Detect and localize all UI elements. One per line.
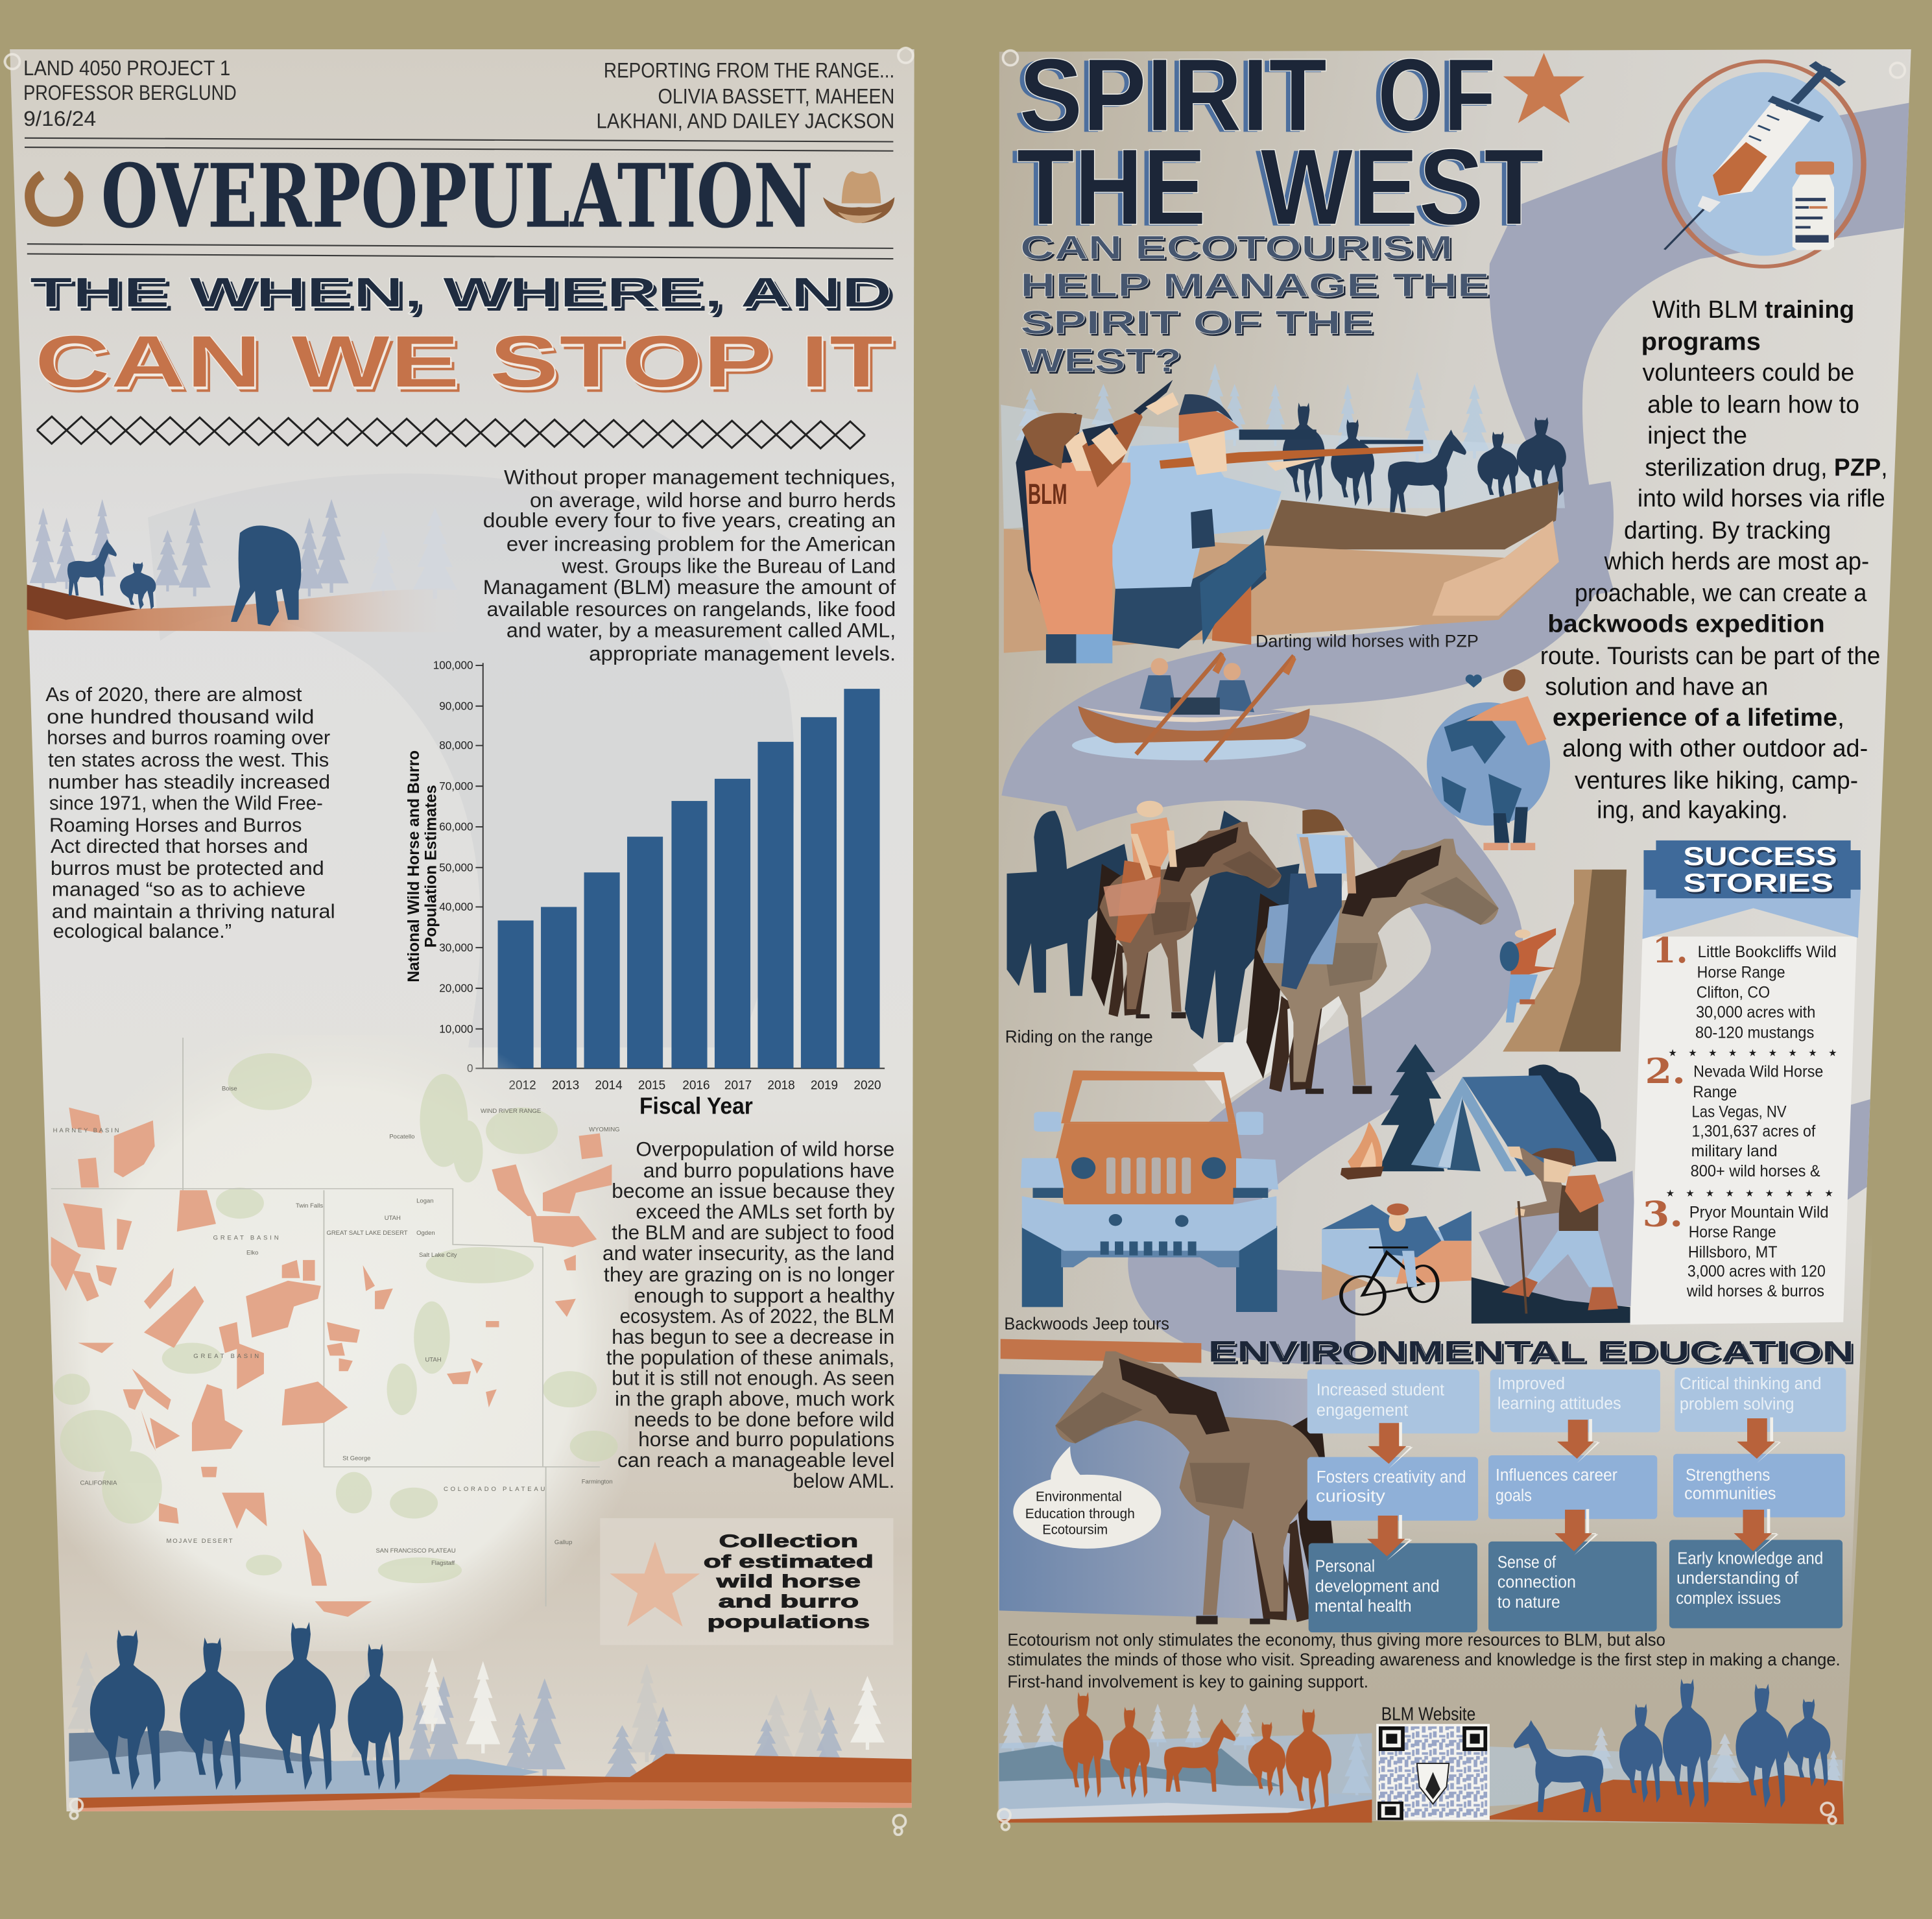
map: estimated herd areas: UTAH [425,1357,442,1364]
map: estimated herd areas: St George [342,1455,370,1462]
text block: training programs: backwoods expedition [1547,611,1825,638]
story 2 nevada: military land [1691,1143,1778,1160]
flow boxes row 1: Improved [1497,1375,1565,1393]
flow boxes row 2: curiosity [1316,1488,1385,1506]
text block: training programs: inject the [1647,422,1747,449]
story 2 nevada: Range [1693,1084,1737,1101]
header left course info: 9/16/24 [23,107,96,130]
text block: training programs: experience of a lifetime , [1553,704,1844,732]
story 1 little bookcliffs: Horse Range [1697,964,1785,982]
text block: intro [483,466,896,665]
text block: overpopulation of wild horse: enough to support a healthy [634,1284,895,1307]
text block: intro: appropriate management levels. [589,642,896,665]
heading: success stories [1683,842,1839,900]
flow boxes row 3 [1309,1540,1843,1632]
map: estimated herd areas: Boise [222,1086,237,1093]
title: spirit of the west: SPIRIT [1019,37,1327,152]
text block: intro: Managament (BLM) measure the amount of [483,576,896,599]
heading: can we stop it: CAN WE STOP IT [36,323,894,405]
caption: riding on the range: Riding on the range [1005,1027,1153,1046]
map legend: collection of populations: Collection [719,1531,858,1551]
bar chart: population estimates: Population Estimates [423,785,440,948]
map: estimated herd areas: Farmington [582,1479,613,1486]
text block: as of 2020: ten states across the west. This [48,749,329,771]
heading: can we stop it: CAN WE STOP IT [34,321,893,403]
text block: training programs: which herds are most ap- [1604,548,1869,575]
header right authors: REPORTING FROM THE RANGE... [604,59,894,82]
bar chart: population estimates: 0 [467,1062,473,1075]
flow boxes row 2: Strengthens [1686,1466,1770,1484]
story 1 little bookcliffs: 1. [1652,930,1688,971]
title: spirit of the west: THE [1016,127,1206,248]
flow boxes row 2: Influences career [1496,1466,1617,1484]
footer scene: horses and ridge [999,1679,1844,1824]
text block: overpopulation of wild horse: has begun to see a decrease in [612,1326,894,1348]
panel: left poster overpopulation [10,49,914,1818]
illustration: darting wild horses [1001,363,1566,663]
title: spirit of the west: SPIRIT [1014,38,1322,154]
map: estimated herd areas: WIND RIVER RANGE [481,1108,541,1115]
heading: environmental education: ENVIRONMENTAL EDUCATION [1208,1335,1854,1368]
subtitle: can ecotourism help: HELP MANAGE THE [1022,268,1492,305]
header right authors [597,59,894,133]
story 3 pryor mountain [1643,1194,1829,1300]
text block: intro: west. Groups like the Bureau of Land [561,555,896,578]
text block: training programs: along with other outdoor ad- [1562,735,1868,763]
text block: as of 2020: ecological balance.” [53,920,232,942]
flow boxes row 2: Fosters creativity and [1317,1468,1466,1486]
text block: as of 2020: since 1971, when the Wild Free- [49,792,323,814]
subtitle: can ecotourism help: WEST? [1022,344,1184,381]
bar chart: population estimates: 2016 [682,1079,710,1093]
story 3 pryor mountain: Horse Range [1689,1224,1776,1241]
bar chart: population estimates: 90,000 [439,700,473,712]
text block: as of 2020 [45,684,335,942]
flow boxes row 1: problem solving [1680,1396,1795,1414]
heading: can we stop it: CAN WE STOP IT [38,326,897,408]
flow boxes row 3: to nature [1497,1593,1560,1612]
panel: success stories [1630,840,1861,1325]
story 2 nevada [1645,1051,1823,1180]
text block: overpopulation of wild horse: needs to be done before wild [634,1409,894,1431]
bar chart: population estimates: 2018 [767,1079,795,1093]
text block: overpopulation of wild horse: horse and burro populations [638,1428,894,1451]
heading: environmental education [1208,1335,1856,1370]
text block: overpopulation of wild horse: become an issue because they [612,1180,895,1202]
heading: the when, where, and: THE WHEN, WHERE, AND [30,270,892,317]
caption: darting wild horses with pzp: Darting wild horses with PZP [1256,632,1479,651]
text block: training programs: into wild horses via rifle [1638,485,1885,512]
text block: as of 2020: horses and burros roaming over [47,727,330,749]
flow boxes row 2: goals [1496,1487,1532,1505]
bar chart: population estimates: 10,000 [439,1023,473,1035]
bar chart: population estimates: 2015 [638,1079,665,1093]
text block: overpopulation of wild horse: but it is still not enough. As seen [612,1367,894,1390]
illustration: person hugging globe [1427,669,1550,850]
map: estimated herd areas: CALIFORNIA [80,1480,117,1487]
text block: training programs: ventures like hiking, camp- [1575,767,1858,794]
scene: grazing horses on ridge [27,499,468,632]
map: estimated herd areas: Flagstaff [431,1560,455,1567]
heading: environmental education: ENVIRONMENTAL EDUCATION [1211,1337,1856,1370]
flow boxes row 1 [1307,1368,1846,1433]
heading: the when, where, and [30,269,896,320]
text block: overpopulation of wild horse: below AML. [793,1470,894,1492]
illustration: camp and tent [1341,1044,1616,1180]
title: spirit of the west: OF [1372,38,1491,154]
icon: horseshoe [30,175,78,222]
bar chart: population estimates: 60,000 [439,821,473,833]
text block: as of 2020: Roaming Horses and Burros [49,815,302,837]
bar chart: population estimates: 50,000 [439,861,473,874]
icon: star [1503,53,1584,123]
text block: training programs: programs [1641,329,1761,356]
flow boxes row 2 [1307,1454,1845,1521]
bar chart: population estimates: National Wild Horse and Burro [405,750,423,983]
flow boxes row 1: engagement [1317,1401,1408,1420]
heading: success stories: SUCCESS [1683,842,1837,871]
map: estimated herd areas [37,1035,628,1651]
text block: intro: available resources on rangelands, like food [486,598,896,621]
bar chart: population estimates: 20,000 [439,983,473,995]
text block: as of 2020: As of 2020, there are almost [45,684,302,706]
map: estimated herd areas: SAN FRANCISCO PLATEAU [376,1547,456,1555]
story 1 little bookcliffs: Clifton, CO [1697,984,1770,1001]
subtitle: can ecotourism help: HELP MANAGE THE [1020,267,1490,304]
story 2 nevada: 2. [1645,1051,1686,1091]
story 3 pryor mountain: Pryor Mountain Wild [1689,1204,1829,1222]
bar chart: population estimates: 2017 [724,1079,752,1093]
text block: intro: double every four to five years, creating an [483,509,896,532]
story 3 pryor mountain: 3,000 acres with 120 [1688,1263,1826,1280]
flow boxes row 3: Personal [1315,1558,1375,1576]
map: estimated herd areas: WYOMING [589,1126,620,1133]
story 1 little bookcliffs: 80-120 mustangs [1695,1025,1814,1042]
text block: overpopulation of wild horse: they are grazing on is no longer [604,1263,894,1286]
story 1 little bookcliffs: Little Bookcliffs Wild [1698,944,1837,961]
illustration: backwoods jeep [1021,1071,1278,1312]
bar chart: population estimates: 30,000 [439,942,473,954]
text block: overpopulation of wild horse: in the graph above, much work [615,1388,895,1411]
text block: training programs: proachable, we can create a [1575,580,1867,607]
text block: overpopulation of wild horse: and burro populations have [643,1160,894,1182]
bar chart: population estimates: 2013 [552,1079,579,1093]
map: estimated herd areas: HARNEY BASIN [53,1127,121,1134]
text block: as of 2020: burros must be protected and [51,857,324,879]
bar chart: population estimates: 80,000 [439,739,473,752]
bar chart: population estimates: 2020 [853,1079,881,1093]
text block: intro: and water, by a measurement called AML, [507,619,896,641]
illustration: riding on the range [1007,801,1499,1094]
story 1 little bookcliffs [1652,930,1837,1042]
text block: training programs: route. Tourists can be part of the [1540,643,1880,670]
header right authors: LAKHANI, AND DAILEY JACKSON [597,110,894,133]
heading: success stories: STORIES [1683,869,1833,898]
illustration: darting wild horses: BLM [1028,477,1067,510]
map: estimated herd areas: Gallup [555,1539,572,1546]
story 2 nevada: 800+ wild horses & [1691,1163,1820,1180]
text block: training programs [1540,296,1888,824]
map: estimated herd areas: MOJAVE DESERT [166,1538,233,1545]
story 3 pryor mountain: wild horses & burros [1686,1283,1824,1300]
diamond border [37,416,865,449]
text block: training programs: darting. By tracking [1624,517,1831,544]
map: estimated herd areas: GREAT SALT LAKE DESERT [326,1230,408,1237]
title: spirit of the west: THE [1012,128,1201,249]
map legend: collection of populations: and burro [719,1591,859,1612]
map: estimated herd areas: Elko [246,1249,258,1256]
header right authors: OLIVIA BASSETT, MAHEEN [658,85,894,108]
qr code: blm website: BLM Website [1381,1704,1475,1725]
text block: overpopulation of wild horse: the BLM and are subject to food [612,1221,894,1244]
caption: backwoods jeep tours: Backwoods Jeep tours [1004,1314,1169,1333]
bar chart: population estimates: 2014 [595,1079,623,1093]
text block: ecotourism summary: Ecotourism not only stimulates the economy, thus giving more resources to BLM, but also [1007,1630,1665,1650]
bar chart: population estimates [405,660,885,1119]
text block: overpopulation of wild horse [602,1138,895,1492]
divider stars: ★★★★★★★★★ [1668,1047,1837,1058]
map: estimated herd areas: Twin Falls [296,1202,323,1210]
text block: as of 2020: one hundred thousand wild [47,706,314,728]
map: estimated herd areas: Logan [416,1197,434,1204]
text block: training programs: able to learn how to [1647,392,1859,419]
illustration: mountain biker [1322,1204,1472,1315]
subtitle: can ecotourism help: CAN ECOTOURISM [1022,231,1455,268]
flow arrows [1367,1418,1781,1560]
text block: intro: ever increasing problem for the American [507,532,896,555]
icon: cowboy hat [823,171,894,223]
map: estimated herd areas: Salt Lake City [419,1252,457,1259]
heading: success stories: STORIES [1685,871,1835,900]
speech bubble: Ecotoursim [1042,1523,1108,1538]
speech bubble: Environmental [1036,1489,1122,1504]
flow boxes row 1: Critical thinking and [1680,1375,1821,1393]
text block: overpopulation of wild horse: can reach a manageable level [617,1449,894,1472]
flow boxes row 3: complex issues [1676,1590,1781,1608]
title: spirit of the west [1012,37,1544,249]
text block: intro: Without proper management techniques, [504,466,896,489]
flow boxes row 3: development and [1315,1577,1440,1595]
illustration: canoe [1072,653,1310,761]
text block: as of 2020: Act directed that horses and [51,835,308,857]
header left course info: PROFESSOR BERGLUND [23,81,237,104]
heading: the when, where, and: THE WHEN, WHERE, AND [30,269,892,316]
title: spirit of the west: OF [1377,37,1496,152]
map: estimated herd areas: COLORADO PLATEAU [444,1486,547,1493]
story 2 nevada: Nevada Wild Horse [1693,1064,1823,1081]
illustration: rock climber [1500,870,1627,1051]
text block: overpopulation of wild horse: the population of these animals, [606,1346,894,1369]
map: estimated herd areas: GREAT BASIN [213,1234,281,1241]
story 2 nevada: Las Vegas, NV [1692,1103,1787,1121]
flow boxes row 3: Sense of [1497,1554,1556,1572]
winding road [1035,102,1913,1318]
speech bubble [1013,1446,1161,1549]
story 2 nevada: 1,301,637 acres of [1692,1123,1815,1141]
divider stars: ★★★★★★★★★ [1666,1188,1833,1199]
title: spirit of the west: WEST [1261,127,1544,248]
text block: ecotourism summary [1007,1630,1841,1691]
bar chart: population estimates: Fiscal Year [639,1093,753,1119]
speech bubble: Education through [1025,1507,1135,1521]
text block: training programs: sterilization drug, PZP, [1645,454,1888,481]
map legend: collection of populations: wild horse [715,1571,861,1591]
flow boxes row 1: Increased student [1317,1381,1444,1399]
text block: overpopulation of wild horse: exceed the AMLs set forth by [636,1200,895,1223]
bar chart: population estimates: 2019 [811,1079,838,1093]
text block: overpopulation of wild horse: and water insecurity, as the land [602,1242,894,1265]
illustration: education horse [1055,1352,1336,1625]
scene: running horses and ridge [67,1622,912,1818]
subtitle: can ecotourism help [1020,229,1492,381]
text block: ecotourism summary: stimulates the minds of those who visit. Spreading awareness and knowledge is the first step in making a change. [1007,1650,1841,1669]
subtitle: can ecotourism help: SPIRIT OF THE [1022,305,1376,342]
subtitle: can ecotourism help: CAN ECOTOURISM [1020,229,1453,266]
bar chart: population estimates: 2012 [508,1079,536,1093]
text block: training programs: solution and have an [1545,674,1768,701]
icon: syringe and vial [1665,62,1864,267]
text block: training programs: ing, and kayaking. [1597,797,1788,824]
flow boxes row 3: understanding of [1676,1569,1799,1588]
qr code: blm website [1376,1704,1490,1820]
map: estimated herd areas: GREAT BASIN [193,1353,261,1360]
text block: overpopulation of wild horse: Overpopulation of wild horse [636,1138,894,1160]
map: estimated herd areas: UTAH [385,1215,401,1222]
flow boxes row 3: Early knowledge and [1677,1550,1823,1568]
text block: intro: on average, wild horse and burro herds [530,489,896,512]
header left course info: LAND 4050 PROJECT 1 [23,56,230,80]
text block: ecotourism summary: First-hand involvement is key to gaining support. [1007,1672,1368,1691]
flow boxes row 1: learning attitudes [1497,1395,1621,1413]
text block: as of 2020: number has steadily increased [48,771,330,793]
map legend: collection of populations [600,1518,893,1645]
story 3 pryor mountain: Hillsboro, MT [1688,1244,1778,1261]
bar chart: population estimates: 70,000 [439,780,473,793]
illustration: hiker [1472,1147,1630,1324]
bar chart: population estimates: 40,000 [439,901,473,913]
text block: overpopulation of wild horse: ecosystem. As of 2022, the BLM [620,1305,894,1328]
map legend: collection of populations: of estimated [704,1551,874,1571]
text block: training programs: volunteers could be [1643,359,1854,387]
title: spirit of the west: WEST [1256,128,1539,249]
story 3 pryor mountain: 3. [1643,1194,1683,1235]
story 1 little bookcliffs: 30,000 acres with [1696,1004,1815,1021]
heading: success stories: SUCCESS [1685,844,1839,873]
text block: as of 2020: and maintain a thriving natural [52,901,335,923]
section: environmental education [999,1335,1856,1691]
flow boxes row 2: communities [1684,1484,1776,1503]
flow boxes row 3: connection [1497,1573,1576,1591]
text block: training programs: With BLM training [1652,296,1854,324]
blue backdrop panel [999,1374,1312,1621]
text block: as of 2020: managed “so as to achieve [52,878,305,900]
flow boxes row 3: mental health [1315,1597,1412,1615]
map legend: collection of populations: populations [708,1612,870,1632]
bar chart: population estimates: 100,000 [433,660,473,672]
heading: can we stop it [34,321,897,408]
subtitle: can ecotourism help: SPIRIT OF THE [1020,304,1374,340]
subtitle: can ecotourism help: WEST? [1020,342,1182,379]
header left course info [23,56,237,130]
faint horse watermark [148,473,794,1047]
map: estimated herd areas: Ogden [416,1230,435,1237]
panel: right poster spirit of the west [998,37,1913,1824]
heading: environmental education: ENVIRONMENTAL EDUCATION [1209,1336,1854,1369]
heading: the when, where, and: THE WHEN, WHERE, AND [33,273,896,320]
map: estimated herd areas: Pocatello [389,1134,414,1141]
title: overpopulation: OVERPOPULATION [101,145,813,248]
